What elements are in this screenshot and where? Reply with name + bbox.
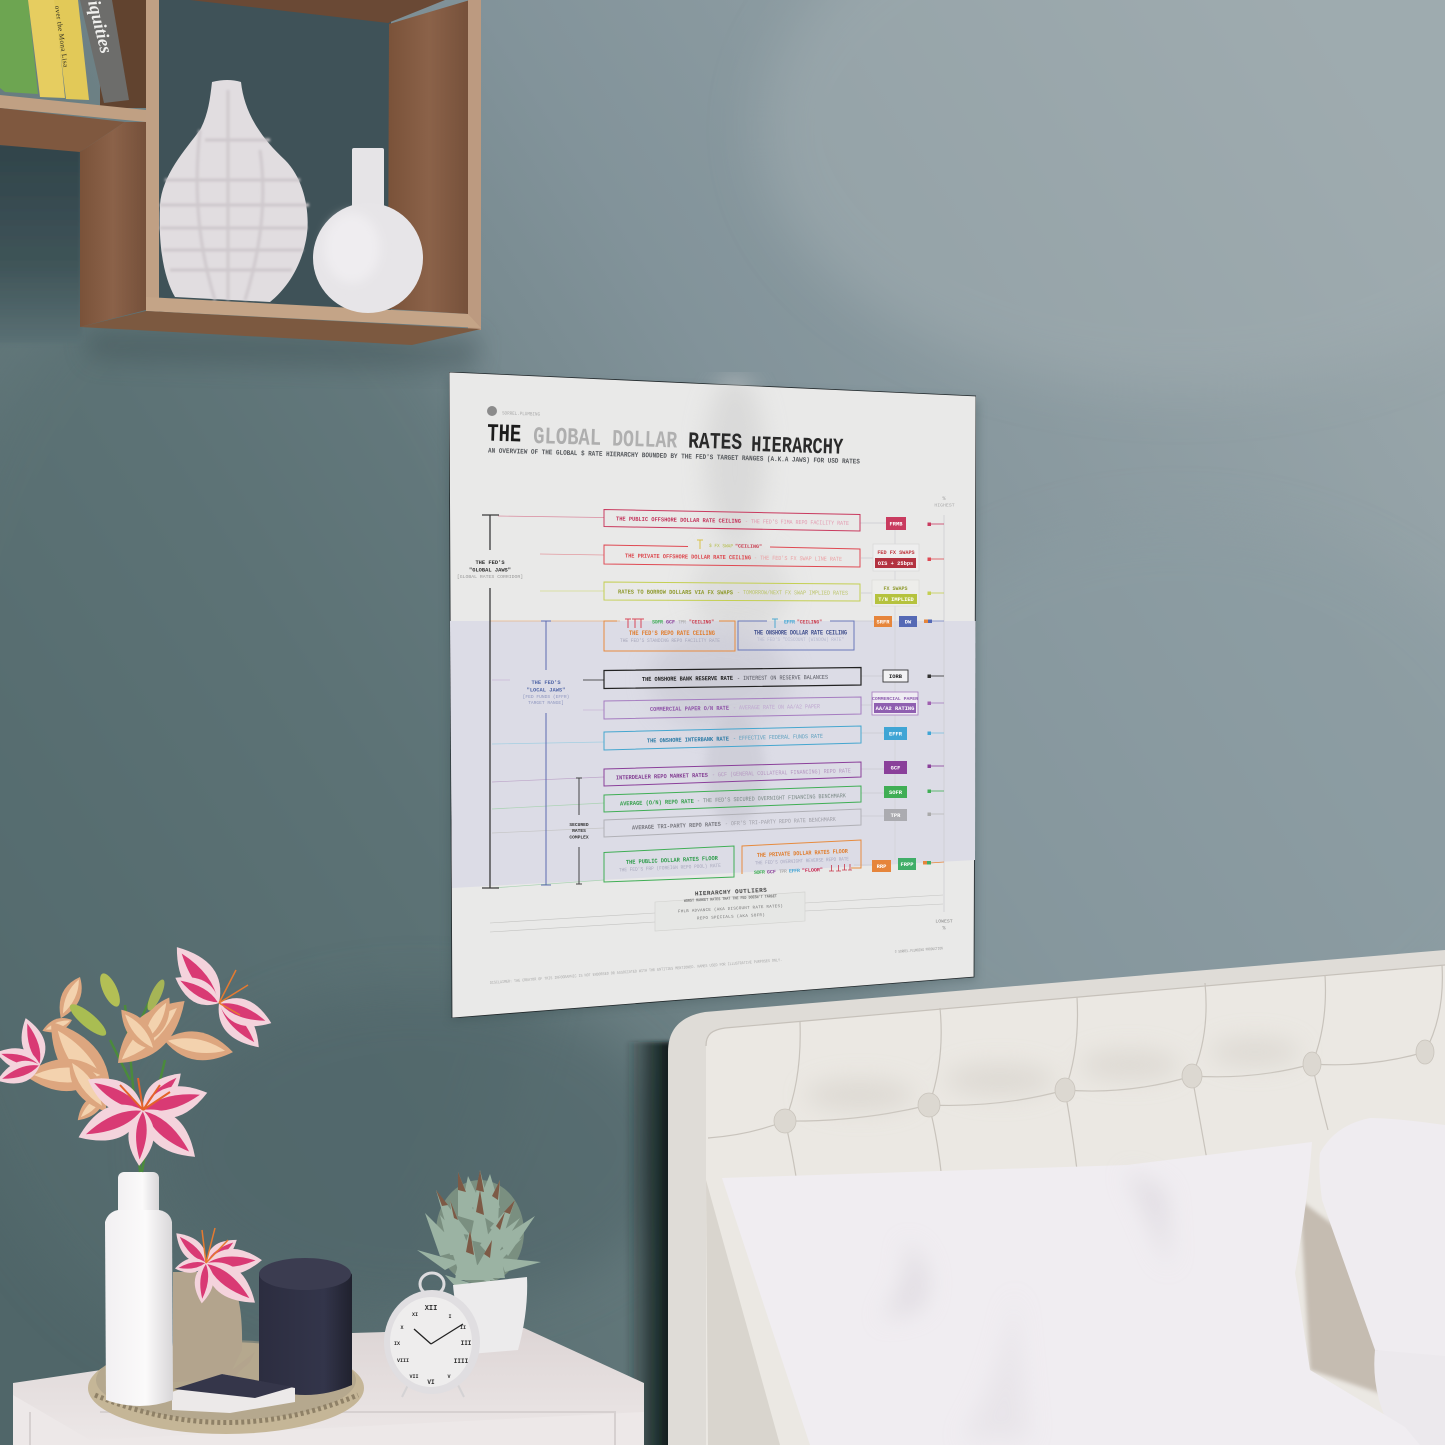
headboard shaded recess (1300, 1200, 1400, 1400)
row: private dollar rates floor: SOFR (754, 870, 765, 876)
shelf: right inner side (388, 0, 470, 314)
headboard inner panel (706, 965, 1445, 1445)
shelf: right front edge (468, 0, 481, 330)
axis label: highest: HIGHEST (934, 502, 955, 508)
clock body (384, 1290, 480, 1394)
row: average tri-party repo rates (604, 809, 861, 837)
main pillow (722, 1142, 1420, 1445)
shelf: book plank top (0, 95, 146, 122)
row: fed's repo rate ceiling: THE FED'S REPO RATE CEILING (629, 630, 715, 637)
rate chip: fed fx swaps: FED FX SWAPS (877, 550, 915, 556)
title: HIERARCHY (751, 432, 844, 461)
row: average tri-party repo rates: - OFR'S TRI-PARTY REPO RATE BENCHMARK (725, 816, 836, 827)
row: interdealer repo market rates (604, 762, 861, 786)
row: fed's repo rate ceiling: SOFR (652, 620, 663, 626)
row: public dollar rates floor: THE PUBLIC DOLLAR RATES FLOOR (626, 855, 718, 866)
rate chip: EFFR (884, 727, 907, 740)
axis label: lowest: % (942, 926, 946, 932)
rate chip: discount window (899, 616, 917, 627)
bed headboard (668, 950, 1445, 1445)
tan pot with small lily (170, 1227, 264, 1382)
buds (96, 971, 124, 1009)
tray (88, 1340, 364, 1434)
poster paper (449, 372, 976, 1018)
row: onshore interbank rate: - EFFECTIVE FEDERAL FUNDS RATE (733, 733, 823, 742)
rate chip: fed fx swaps: OIS + 25bps (878, 561, 913, 567)
row: onshore bank reserve rate (604, 668, 861, 688)
axis label: highest (934, 496, 955, 508)
rate chip: ON RRP (872, 860, 891, 872)
rate chip: SOFR: SOFR (889, 790, 903, 796)
clock face (390, 1297, 472, 1387)
dark cup (259, 1258, 352, 1395)
rate chip: fx swaps (872, 580, 919, 606)
row: fed's repo rate ceiling: TPR (678, 620, 686, 626)
plant in white pot (417, 1170, 541, 1354)
row: public dollar rates floor: THE FED'S FRP (FOREIGN REPO POOL) RATE (619, 863, 721, 873)
label: local jaws: [FED FUNDS (EFFR) (523, 694, 569, 700)
shelf: front face (80, 311, 481, 345)
duvet folds at right (1374, 1350, 1445, 1445)
hierarchy outliers: REPO SPECIALS (AKA SOFR) (697, 913, 765, 921)
logo and brand: SORREL.PLUMBING (502, 411, 540, 418)
subtitle: AN OVERVIEW OF THE GLOBAL $ RATE HIERARCHY BOUNDED BY THE FED'S TARGET RANGES (A.K.A JAWS) FOR USD RATES (488, 448, 860, 467)
row: fed's repo rate ceiling (604, 619, 735, 651)
clock numerals: VI (427, 1379, 435, 1386)
hierarchy outliers: HIERARCHY OUTLIERS (695, 887, 767, 897)
top pink lily (164, 937, 276, 1056)
hierarchy outliers: WORST MARKET RATES THAT THE FED DOESN'T TARGET (684, 894, 777, 904)
row: commercial paper rate: COMMERCIAL PAPER O/N RATE (650, 705, 729, 713)
axis label: lowest: LOWEST (935, 918, 953, 924)
shelf: book plank underside (0, 108, 125, 152)
label: global jaws (457, 560, 523, 580)
poster: faint silhouette watermark (650, 375, 790, 825)
clock numerals: VII (409, 1374, 419, 1380)
row: onshore dollar rate ceiling: THE ONSHORE DOLLAR RATE CEILING (754, 630, 847, 636)
row: average overnight repo rate (604, 786, 861, 812)
disclaimer: DISCLAIMER: THE CREATOR OF THIS INFOGRAPHIC IS NOT ENDORSED OR ASSOCIATED WITH THE ENTITIES MENTIONED. NAMES USED FOR ILLUSTRATIVE PURPOSES ONLY. (490, 959, 782, 986)
label: secured rates complex: COMPLEX (569, 834, 589, 840)
row: private offshore ceiling: $ FX SWAP (709, 543, 733, 549)
rate chip: commercial paper (872, 692, 918, 715)
row: public offshore ceiling: THE PUBLIC OFFSHORE DOLLAR RATE CEILING (616, 516, 741, 525)
row: interdealer repo market rates: - GCF (GENERAL COLLATERAL FINANCING) REPO RATE (712, 767, 851, 778)
row: onshore bank reserve rate: - INTEREST ON RESERVE BALANCES (737, 674, 828, 682)
rate chip: EFFR: EFFR (889, 732, 903, 738)
clock numerals: XI (412, 1312, 418, 1318)
clock numerals: X (400, 1325, 404, 1331)
rate chip: FIMA repo facility: FRMB (890, 522, 903, 528)
label: global jaws: [GLOBAL RATES CORRIDOR] (457, 574, 523, 580)
table top surface (13, 1328, 644, 1440)
clock hands (414, 1324, 463, 1344)
rate chip: FIMA repo facility (886, 517, 906, 530)
shelf: floor plank (146, 297, 481, 328)
rate chip: SRF (874, 616, 892, 627)
row: borrow dollars via fx swaps: RATES TO BORROW DOLLARS VIA FX SWAPS (618, 589, 733, 596)
row: private offshore ceiling: "CEILING" (735, 544, 762, 550)
stems (110, 1000, 165, 1172)
rate chip: IORB: IORB (889, 674, 903, 680)
row: average overnight repo rate: - THE FED'S SECURED OVERNIGHT FINANCING BENCHMARK (697, 792, 846, 804)
shelf: vertical divider inner (80, 122, 146, 327)
row: fed's repo rate ceiling: GCF (666, 620, 675, 626)
tuft buttons (774, 1040, 1434, 1133)
pillow folds (880, 1170, 1170, 1440)
bedding (722, 1118, 1445, 1445)
shelf: dark wall inside lower-left gap (0, 143, 82, 343)
row: private dollar rates floor: TPR (779, 869, 787, 875)
row: private dollar rates floor: THE FED'S OVERNIGHT REVERSE REPO RATE (755, 856, 849, 866)
row: onshore dollar rate ceiling: THE FED'S "DISCOUNT (WINDOW) RATE" (757, 637, 844, 643)
scale markers along the right axis (923, 522, 944, 864)
right pillow (1319, 1118, 1445, 1360)
shelf: top panel underside (190, 0, 445, 23)
row: commercial paper rate: - AVERAGE RATE ON AA/A2 PAPER (733, 703, 820, 711)
rate chip: FRPP (898, 858, 916, 870)
row: onshore bank reserve rate: THE ONSHORE BANK RESERVE RATE (642, 675, 733, 683)
row: average tri-party repo rates: AVERAGE TRI-PARTY REPO RATES (632, 821, 721, 831)
axis label: highest: % (942, 496, 946, 502)
label: local jaws: TARGET RANGE] (528, 700, 564, 706)
row: private offshore ceiling: - THE FED'S FX SWAP LINE RATE (754, 555, 842, 563)
white square pot (453, 1277, 527, 1354)
clock numerals: VIII (397, 1358, 409, 1364)
row: public offshore ceiling (604, 510, 860, 531)
clock numerals: V (447, 1374, 451, 1380)
logo and brand (487, 406, 540, 418)
secured rates complex bracket (569, 778, 589, 884)
title: THE (487, 420, 522, 450)
row: onshore interbank rate: THE ONSHORE INTERBANK RATE (647, 735, 729, 744)
poster: lavender jaws band (450, 621, 976, 888)
label: global jaws: "GLOBAL JAWS" (469, 568, 511, 574)
row: commercial paper rate (604, 697, 861, 719)
row: private dollar rates floor: GCF (767, 869, 776, 875)
rate chip: IORB (883, 670, 908, 682)
clock numerals: II (460, 1325, 466, 1331)
white bottle (105, 1172, 173, 1406)
row: average overnight repo rate: AVERAGE (O/N) REPO RATE (620, 798, 694, 807)
row: borrow dollars via fx swaps: - TOMORROW/NEXT FX SWAP IMPLIED RATES (737, 589, 848, 597)
books (0, 0, 129, 103)
shelf: back wall of main cube (159, 0, 391, 312)
row: public offshore ceiling: - THE FED'S FIMA REPO FACILITY RATE (745, 518, 849, 527)
shelf: vertical divider front edge (146, 0, 159, 310)
alarm clock (384, 1273, 480, 1397)
row: private offshore ceiling (604, 540, 860, 567)
side table (13, 1328, 644, 1445)
row: fed's repo rate ceiling: THE FED'S STANDING REPO FACILITY RATE (620, 638, 720, 644)
clock ring (420, 1273, 444, 1295)
rate chip: fx swaps: FX SWAPS (883, 586, 908, 592)
rate chip: SOFR (884, 786, 907, 798)
clock numerals: XII (425, 1305, 437, 1313)
hierarchy outliers: FHLB ADVANCE (AKA DISCOUNT RATE RATES) (678, 904, 783, 914)
row: onshore dollar rate ceiling: "CEILING" (797, 620, 822, 626)
left pink lily (0, 1015, 51, 1090)
rate chip: GCF: GCF (891, 766, 900, 772)
books: over the Mona Lisa (53, 5, 70, 69)
vase: large textured (160, 80, 309, 302)
row: interdealer repo market rates: INTERDEALER REPO MARKET RATES (616, 772, 708, 781)
tuft shadows (805, 1038, 1300, 1111)
rate chip: ON RRP: RRP (877, 864, 886, 870)
label: secured rates complex: SECURED (569, 822, 589, 828)
connector lines (490, 515, 944, 912)
peach petals (25, 973, 235, 1126)
label: global jaws: THE FED'S (475, 560, 505, 566)
row: private dollar rates floor: THE PRIVATE DOLLAR RATES FLOOR (757, 848, 848, 859)
rate chip: SRF: SRFR (877, 620, 890, 626)
vase: small round (313, 148, 423, 313)
label: secured rates complex: RATES (572, 828, 586, 834)
rate chip: GCF (884, 761, 907, 774)
succulent leaves (417, 1170, 541, 1286)
axis label: lowest (935, 918, 953, 932)
rate chip: commercial paper: COMMERCIAL PAPER (872, 696, 918, 702)
row: private dollar rates floor (742, 840, 861, 876)
local jaws bracket (523, 621, 569, 885)
clock feet (402, 1385, 464, 1397)
clock numerals: IIII (454, 1358, 469, 1365)
rate chip: commercial paper: AA/A2 RATING (876, 706, 914, 712)
rate chip: fed fx swaps (873, 544, 919, 571)
label: local jaws: "LOCAL JAWS" (527, 688, 565, 694)
label: local jaws (523, 680, 569, 706)
rate chip: discount window: DW (905, 620, 912, 626)
title: GLOBAL (533, 424, 602, 453)
tufted creases (708, 965, 1442, 1183)
production credit: © SORREL.PLUMBING PRODUCTION (895, 946, 943, 955)
row: onshore dollar rate ceiling (738, 619, 854, 650)
label: local jaws: THE FED'S (531, 680, 561, 686)
title (487, 420, 844, 461)
wooden wall shelf (0, 0, 481, 345)
lily bouquet (0, 937, 276, 1172)
clock numerals: IX (394, 1341, 400, 1347)
global jaws bracket (457, 515, 523, 888)
poster: The Global Dollar Rates Hierarchy (449, 372, 976, 1018)
rate chip: FRPP: FRPP (901, 862, 913, 868)
clock numerals: I (448, 1314, 452, 1320)
title: DOLLAR (612, 427, 678, 455)
front star lily (72, 1065, 211, 1169)
poster shadow (447, 378, 978, 1021)
clock numerals: III (461, 1340, 472, 1347)
shelf: back panel of book cube (100, 0, 146, 108)
label: secured rates complex (569, 822, 589, 840)
row: onshore dollar rate ceiling: EFFR (784, 620, 795, 626)
rate chip: TPR (884, 809, 907, 821)
row: fed's repo rate ceiling: "CEILING" (689, 620, 714, 626)
row: borrow dollars via fx swaps (604, 582, 860, 601)
title: RATES (688, 429, 743, 456)
row: private dollar rates floor: EFFR (789, 868, 800, 874)
row: private offshore ceiling: THE PRIVATE OFFSHORE DOLLAR RATE CEILING (625, 553, 751, 561)
small lily (170, 1227, 264, 1314)
rate chip: fx swaps: T/N IMPLIED (878, 597, 915, 603)
dark gap shadow left of headboard (625, 1042, 675, 1445)
clock numerals (394, 1305, 472, 1386)
hierarchy outliers (490, 887, 943, 932)
row: onshore interbank rate (604, 726, 861, 750)
rate chip: TPR: TPR (891, 813, 901, 819)
headboard frame (668, 950, 1445, 1445)
table front (13, 1385, 644, 1445)
row: private dollar rates floor: "FLOOR" (802, 867, 823, 874)
row: public dollar rates floor (604, 846, 734, 882)
small book (172, 1374, 295, 1413)
